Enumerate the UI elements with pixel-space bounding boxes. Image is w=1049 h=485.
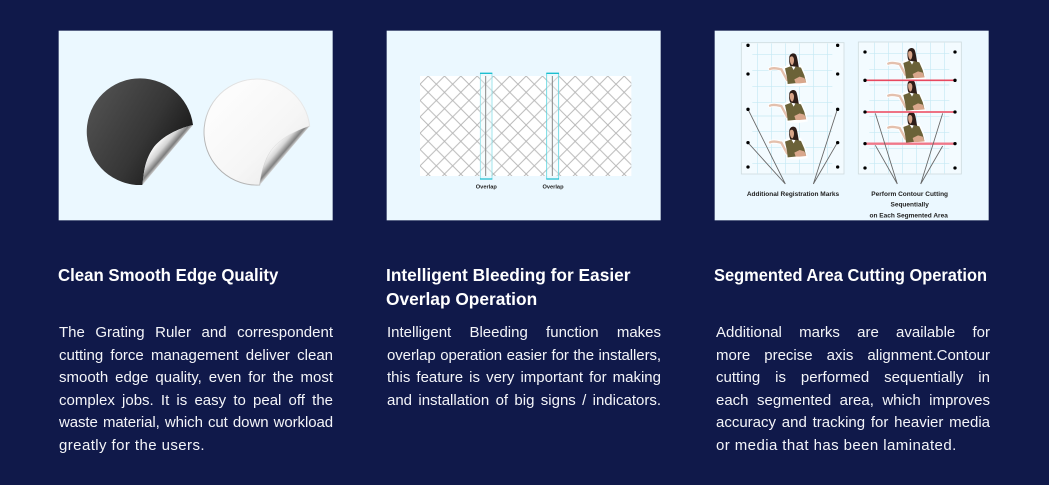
panel background [59, 31, 333, 220]
panel: overlap mesh image [386, 30, 661, 220]
text: clean smooth edge description: waste material, which cut down workload [59, 414, 333, 431]
mesh pattern [420, 76, 631, 176]
overlap labels [476, 185, 564, 191]
panel background [387, 31, 661, 220]
right sheet [858, 42, 961, 184]
text: clean smooth edge description: smooth edge quality, even for the most [59, 369, 333, 386]
diagram captions: Perform Contour Cutting [871, 191, 948, 198]
diagram captions: Additional Registration Marks [747, 191, 840, 198]
overlap labels: Overlap [476, 185, 497, 191]
overlap band two [546, 73, 559, 179]
heading: intelligent bleeding: Intelligent Bleeding for Easier [386, 265, 631, 285]
heading: intelligent bleeding [386, 265, 631, 309]
overlap labels: Overlap [542, 185, 564, 191]
heading: clean smooth edge quality: Clean Smooth Edge Quality [58, 265, 278, 285]
text: segmented area description: more precise axis alignment.Contour [716, 346, 990, 364]
text: segmented area description: accuracy and tracking for heavier media [716, 414, 990, 431]
heading: segmented area cutting: Segmented Area Cutting Operation [714, 265, 987, 285]
heading: intelligent bleeding: Overlap Operation [386, 289, 537, 309]
text: segmented area description: each segmented area, which improves [716, 392, 990, 408]
diagram captions [747, 191, 948, 219]
text: segmented area description: Additional marks are available for [716, 324, 990, 341]
text: intelligent bleeding description: overlap operation easier for the installers, [387, 346, 661, 364]
panel: registration marks image [714, 30, 989, 220]
text: clean smooth edge description [59, 324, 333, 454]
text: clean smooth edge description: greatly for the users. [59, 436, 205, 454]
diagram captions: Sequentially [890, 202, 929, 209]
icon: black peeled sticker [87, 78, 193, 185]
text: clean smooth edge description: complex jobs. It is easy to peal off the [59, 392, 333, 408]
panel background [715, 31, 989, 220]
left sheet [741, 43, 844, 184]
text: clean smooth edge description: cutting force management deliver clean [59, 346, 333, 364]
text: intelligent bleeding description: and installation of big signs / indicators. [387, 392, 661, 408]
text: segmented area description: or media that has been laminated. [716, 436, 957, 454]
icon: white peeled sticker [204, 79, 310, 185]
text: intelligent bleeding description [387, 324, 661, 408]
text: intelligent bleeding description: this feature is very important for making [387, 369, 661, 386]
overlap band one [480, 73, 492, 179]
panel: sticker image [58, 30, 333, 220]
text: clean smooth edge description: The Grating Ruler and correspondent [59, 324, 333, 341]
text: segmented area description [716, 324, 990, 454]
text: segmented area description: cutting is performed sequentially in [716, 369, 990, 386]
text: intelligent bleeding description: Intelligent Bleeding function makes [387, 324, 661, 341]
diagram captions: on Each Segmented Area [869, 212, 948, 219]
